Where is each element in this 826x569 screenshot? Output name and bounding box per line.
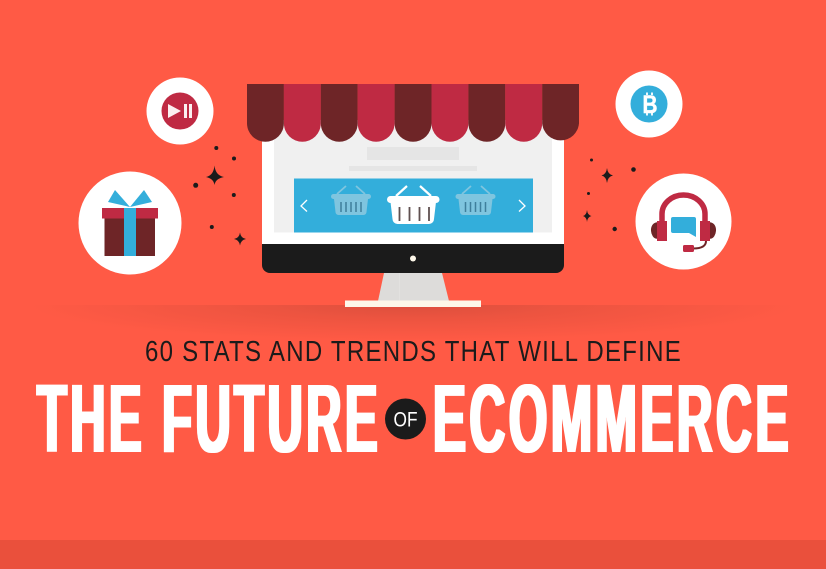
monitor stand bbox=[378, 273, 449, 301]
title: the future: THE FUTURE bbox=[37, 364, 381, 473]
icon: support headset bbox=[636, 174, 732, 270]
icon: bitcoin: B bbox=[642, 91, 658, 119]
icon: gift box bbox=[78, 172, 182, 274]
illustration: storefront monitor bbox=[247, 84, 579, 307]
awning bbox=[247, 84, 579, 142]
arrow: next bbox=[519, 200, 525, 212]
icon: media player bbox=[146, 78, 214, 144]
arrow: previous bbox=[301, 200, 307, 212]
icon: centre basket bbox=[387, 186, 440, 224]
screen bbox=[274, 120, 552, 232]
bottom band bbox=[0, 540, 826, 569]
badge: of bbox=[385, 398, 426, 440]
floor shadow bbox=[30, 305, 796, 377]
monitor frame bbox=[262, 120, 564, 245]
badge: of: OF bbox=[394, 408, 418, 432]
power light bbox=[410, 256, 416, 262]
icon: left basket bbox=[331, 186, 371, 215]
subtitle: 60 STATS AND TRENDS THAT WILL DEFINE bbox=[145, 336, 682, 368]
carousel panel bbox=[294, 178, 533, 232]
sparkles left bbox=[193, 146, 246, 246]
monitor chin bbox=[262, 244, 564, 273]
icon: bitcoin bbox=[616, 70, 682, 138]
sparkles right bbox=[583, 158, 636, 231]
icon: right basket bbox=[456, 186, 496, 215]
monitor base bbox=[345, 300, 481, 307]
page subtitle placeholder bbox=[349, 166, 477, 171]
page title placeholder bbox=[367, 147, 459, 160]
